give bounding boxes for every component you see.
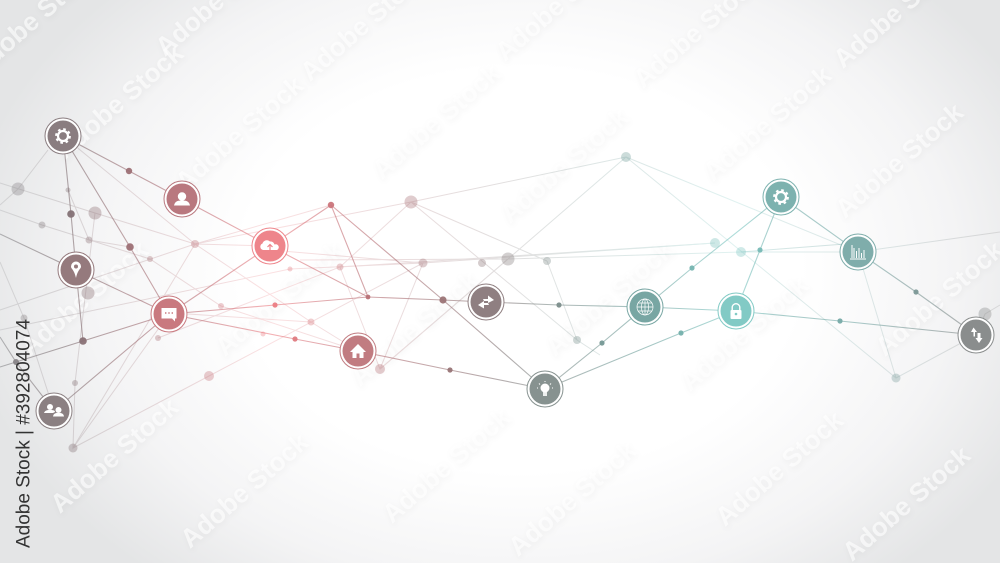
node icon: user: [164, 181, 200, 217]
node icon: location pin: [58, 252, 94, 288]
watermark pattern: Adobe Stock: [49, 37, 189, 165]
watermark pattern: Adobe Stock: [836, 439, 976, 563]
watermark pattern: Adobe Stock: [169, 69, 309, 197]
watermark pattern: Adobe Stock: [674, 269, 814, 397]
side credit text: Adobe Stock | #392804074: [14, 319, 34, 548]
node icon: chat bubble: [151, 296, 187, 332]
node icon: globe: [627, 289, 663, 325]
node icon: people: [36, 393, 72, 429]
watermark pattern: Adobe Stock: [174, 426, 314, 554]
watermark pattern: Adobe Stock: [829, 96, 969, 224]
watermark pattern: Adobe Stock: [366, 57, 506, 185]
network: small solid junction dots: [13, 168, 919, 373]
watermark pattern: Adobe Stock: [494, 101, 634, 229]
node icon: bar chart: [840, 234, 876, 270]
watermark pattern: Adobe Stock: [709, 404, 849, 532]
network: strong connection lines: [0, 136, 976, 411]
watermark pattern: Adobe Stock: [539, 234, 679, 362]
node icon: padlock: [718, 293, 754, 329]
network: faint background lines: [0, 136, 1000, 448]
node icon: exchange arrows: [468, 284, 504, 320]
watermark pattern: Adobe Stock: [502, 434, 642, 562]
network: faint nodes: [12, 152, 992, 452]
watermark pattern: Adobe Stock: [209, 234, 349, 362]
node icon: up and down arrows: [958, 317, 994, 353]
watermark pattern: Adobe Stock: [344, 264, 484, 392]
watermark pattern: Adobe Stock: [697, 59, 837, 187]
watermark pattern: Adobe Stock: [376, 401, 516, 529]
node icon: home: [340, 333, 376, 369]
node icon: cloud upload: [252, 228, 288, 264]
node icon: gear (left): [45, 118, 81, 154]
node icon: light bulb: [527, 371, 563, 407]
watermark pattern: Adobe Stock: [44, 391, 184, 519]
watermark pattern: Adobe Stock: [14, 234, 154, 362]
node icon: gear (right): [763, 179, 799, 215]
